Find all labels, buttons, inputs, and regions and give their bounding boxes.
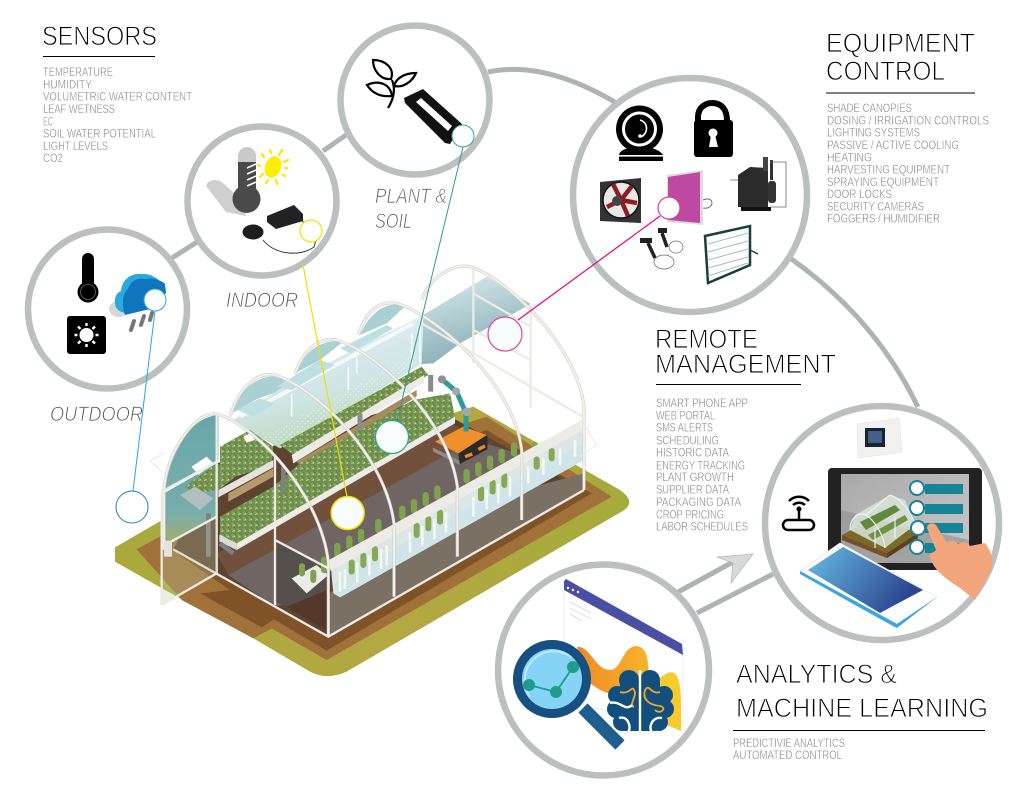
glass roof — [233, 315, 423, 448]
icon: magnifying glass — [513, 640, 620, 745]
list: sensors: CO2 — [43, 153, 63, 165]
list: sensors: SOIL WATER POTENTIAL — [43, 128, 156, 140]
list: equipment control: FOGGERS / HUMIDIFIER — [827, 214, 940, 226]
front bench panel — [331, 427, 584, 597]
icon: controller box — [857, 418, 902, 458]
white gaps seen through end wall — [192, 433, 255, 475]
icon: sun tile — [67, 316, 106, 354]
upper bench foliage — [280, 367, 428, 455]
icon: padlock — [694, 103, 733, 157]
floor: dark end — [287, 590, 327, 632]
heading: remote management: REMOTE — [655, 324, 758, 354]
icon: webcam — [616, 106, 663, 161]
list: remote management: PLANT GROWTH — [656, 472, 734, 484]
back vent tube — [422, 277, 531, 364]
list: sensors: TEMPERATURE — [43, 67, 113, 79]
roof vent tabs — [237, 325, 393, 417]
front bench rail — [328, 422, 582, 571]
icon: indoor thermometer — [206, 147, 260, 216]
hand — [927, 523, 993, 600]
list: equipment control: SPRAYING EQUIPMENT — [827, 177, 939, 189]
heading: sensors: SENSORS — [42, 21, 157, 51]
panel: analytics and machine learning — [498, 564, 709, 776]
far row foliage — [220, 430, 273, 482]
list: remote management: PACKAGING DATA — [656, 497, 741, 509]
label: indoor: INDOOR — [226, 289, 298, 312]
floor: grey walkway — [228, 440, 530, 607]
icon: thermometer — [78, 253, 98, 302]
list: sensors: LIGHT LEVELS — [43, 141, 108, 153]
panel: outdoor — [28, 230, 187, 388]
data waves — [577, 646, 681, 731]
smartphone — [800, 543, 937, 628]
heading: equipment control — [826, 28, 975, 94]
heading: analytics and machine learning: ANALYTICS & — [736, 659, 897, 689]
leader: outdoor — [116, 289, 166, 523]
list: remote management: LABOR SCHEDULES — [656, 521, 748, 533]
floor: base — [173, 400, 584, 637]
icon: cable connectors — [640, 228, 683, 269]
floor: dark pane — [275, 540, 328, 607]
list: remote management: ENERGY TRACKING — [656, 460, 745, 472]
leader: indoor — [300, 220, 364, 530]
list: equipment control: DOSING / IRRIGATION CONTROLS — [827, 115, 989, 127]
tan strip — [297, 390, 417, 467]
frame: back arches and bars — [230, 266, 584, 597]
far tan strip — [228, 468, 273, 502]
mini greenhouse — [842, 495, 918, 558]
list: remote management: WEB PORTAL — [656, 410, 715, 422]
panel: remote management — [765, 406, 999, 640]
arrow head — [717, 554, 753, 583]
ground: olive base — [115, 407, 629, 676]
list: remote management — [656, 398, 748, 533]
greenhouse illustration — [115, 266, 629, 676]
roof ridge and streaks — [240, 323, 420, 417]
list: analytics: PREDICTIVIE ANALYTICS — [733, 738, 845, 750]
leader: equipment — [488, 197, 680, 351]
list: remote management: SCHEDULING — [656, 435, 719, 447]
list: remote management: SUPPLIER DATA — [656, 484, 729, 496]
list: remote management: CROP PRICING — [656, 509, 724, 521]
small bench — [292, 565, 328, 593]
label: soil: SOIL — [375, 210, 412, 233]
icon: fogger machine — [730, 157, 786, 211]
front bench plants upper — [337, 442, 552, 554]
frame: front arch and base — [150, 414, 597, 637]
list: equipment control: SECURITY CAMERAS — [827, 201, 924, 213]
label: outdoor: OUTDOOR — [50, 403, 143, 426]
list: sensors: EC — [43, 116, 53, 128]
heading: equipment control: CONTROL — [826, 56, 945, 86]
list: remote management: SMS ALERTS — [656, 423, 713, 435]
icon: LED panel — [667, 170, 712, 225]
robot — [433, 375, 487, 465]
list: sensors: HUMIDITY — [43, 79, 92, 91]
front bench trough — [333, 443, 584, 597]
back roof arc shades — [232, 304, 407, 413]
list: sensors — [43, 67, 192, 165]
list: analytics — [733, 738, 845, 762]
sink and legs — [180, 375, 431, 557]
front bench plants lower — [352, 451, 552, 572]
middle bench foliage — [220, 393, 455, 544]
end wall glass — [164, 415, 218, 547]
list: equipment control: DOOR LOCKS — [827, 189, 892, 201]
list: remote management: HISTORIC DATA — [656, 448, 729, 460]
heading: equipment control: EQUIPMENT — [826, 28, 975, 58]
heading: remote management: MANAGEMENT — [655, 349, 836, 379]
end wall lower glass — [164, 463, 217, 547]
list: equipment control: LIGHTING SYSTEMS — [827, 128, 920, 140]
panel: plant and soil — [340, 26, 490, 174]
foliage near left — [185, 463, 240, 493]
panel: equipment control — [573, 78, 807, 312]
icon: exhaust fan — [600, 178, 641, 223]
list: equipment control: HARVESTING EQUIPMENT — [827, 165, 950, 177]
list: sensors: VOLUMETRIC WATER CONTENT — [43, 92, 192, 104]
upper bench — [292, 375, 424, 463]
icon: louvre — [705, 226, 758, 283]
list: sensors: LEAF WETNESS — [43, 104, 115, 116]
list: equipment control: SHADE CANOPIES — [827, 103, 912, 115]
connector arcs — [172, 69, 918, 613]
roof speckle — [263, 350, 422, 448]
list: equipment control: PASSIVE / ACTIVE COOLING — [827, 140, 959, 152]
leader: plant and soil — [376, 125, 474, 454]
icon: wifi router — [783, 497, 814, 530]
heading: analytics and machine learning — [733, 659, 988, 731]
list: remote management: SMART PHONE APP — [656, 398, 748, 410]
tablet — [828, 468, 982, 570]
app menu — [910, 481, 963, 554]
floor: brown strip — [217, 423, 480, 575]
label: plant and soil: PLANT & — [375, 185, 447, 208]
list: equipment control: HEATING — [827, 152, 872, 164]
middle bench end — [219, 534, 237, 550]
icon: soil probe — [404, 89, 462, 144]
heading: analytics and machine learning: MACHINE LEARNING — [736, 693, 988, 723]
icon: yellow sun — [258, 150, 288, 184]
browser window — [564, 579, 683, 730]
open door — [162, 462, 217, 605]
icon: brain — [607, 670, 674, 732]
panel: indoor — [188, 126, 336, 276]
floor: front band — [328, 473, 584, 637]
heading: remote management — [655, 324, 836, 385]
icon: sprig — [367, 60, 416, 108]
far bench — [218, 460, 273, 497]
small bench plants — [302, 559, 324, 580]
icon: rain cloud — [109, 274, 166, 330]
middle bench — [237, 417, 455, 550]
front bench posts — [340, 440, 575, 592]
ground: brown bed — [137, 417, 612, 660]
list: equipment control — [827, 103, 989, 226]
list: analytics: AUTOMATED CONTROL — [733, 750, 842, 762]
icon: indoor sensor — [242, 205, 316, 253]
ground: dark soil band — [177, 430, 592, 651]
